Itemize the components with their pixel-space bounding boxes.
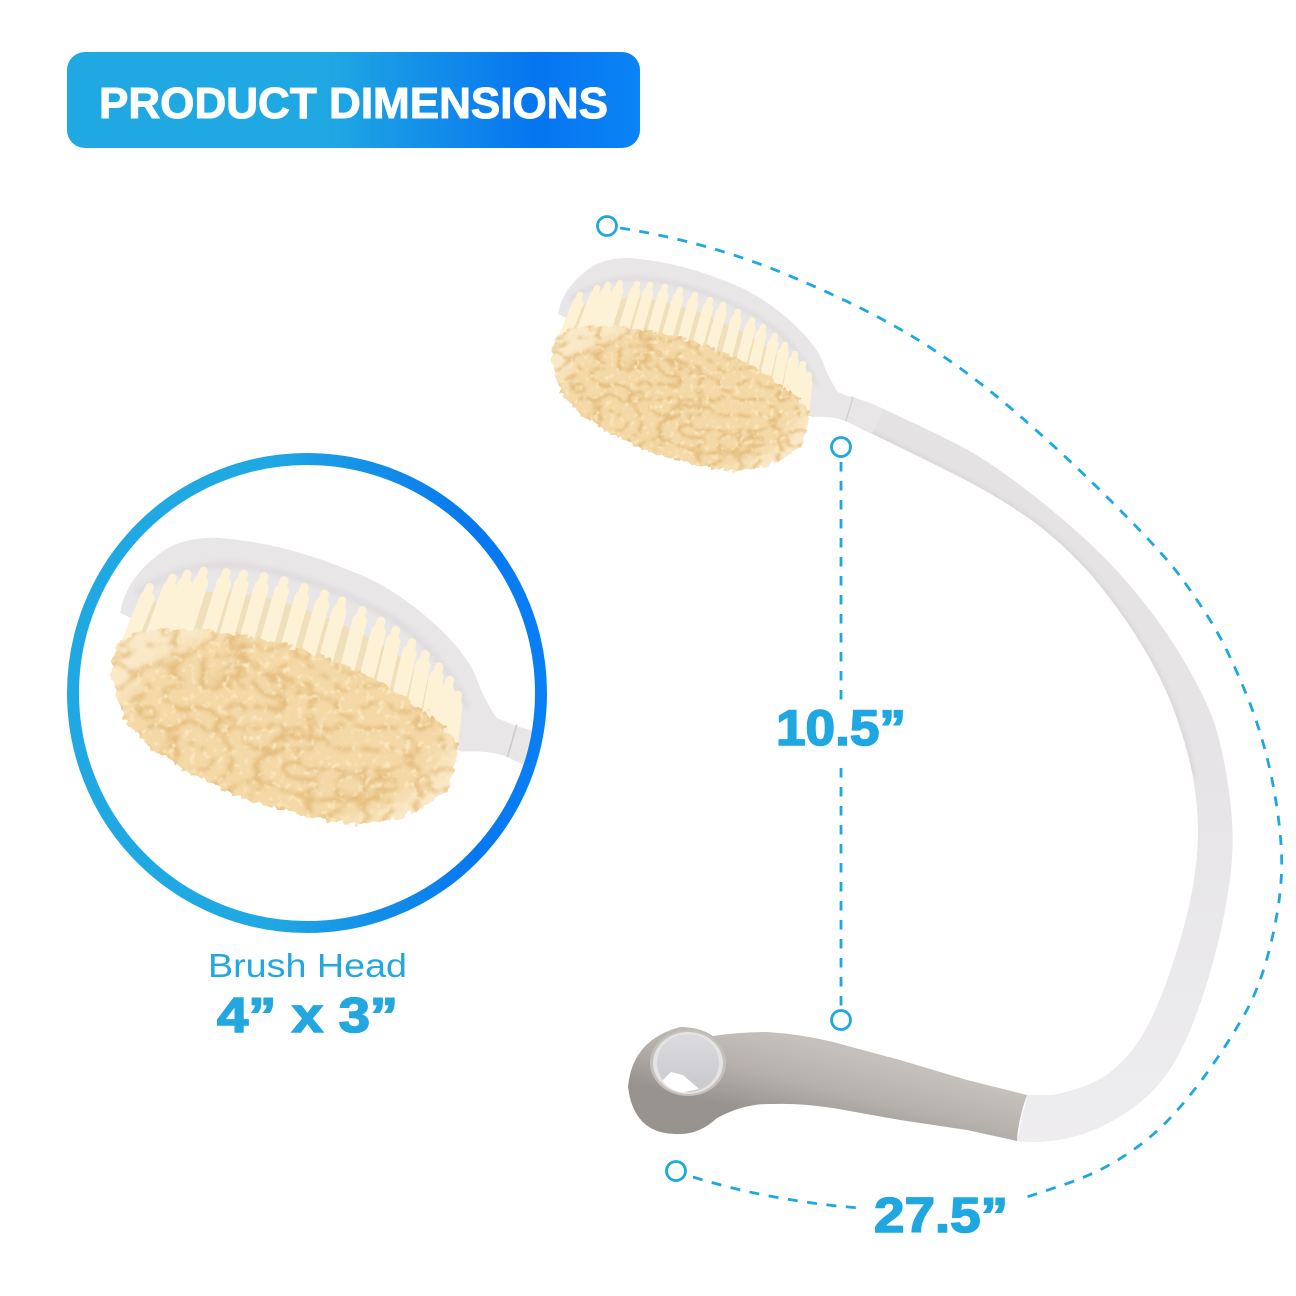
panel: brush head close-up circle (73, 459, 559, 927)
product: long curved handle (843, 396, 1233, 1142)
caption: brush head size: 4” x 3” (217, 989, 398, 1043)
bristle shadow backing (562, 298, 806, 420)
product: grey grip with loop (628, 1027, 1027, 1141)
dimension: overall length 27.5 inch arc: 27.5” (874, 1189, 1008, 1243)
dimension: handle span 10.5 inch (776, 438, 906, 1030)
close-up brush image (112, 538, 559, 823)
caption: brush head size: Brush Head (208, 947, 407, 984)
textured sponge face (552, 326, 809, 470)
heading: product dimensions banner (67, 52, 640, 148)
white plate and neck (558, 258, 884, 433)
plate inner shade (570, 278, 816, 385)
caption: brush head size (208, 947, 407, 1043)
dimension: overall length 27.5 inch arc (598, 216, 1282, 1243)
heading: product dimensions banner: PRODUCT DIMENSIONS (99, 79, 608, 128)
cream bristle tufts, narrow tips (565, 283, 809, 415)
dimension: handle span 10.5 inch: 10.5” (776, 700, 906, 756)
product: main brush head (552, 258, 884, 470)
neck seam (846, 397, 853, 421)
cream bristle tufts, wide lower part (565, 291, 807, 420)
icon: loop hole (650, 1030, 726, 1096)
